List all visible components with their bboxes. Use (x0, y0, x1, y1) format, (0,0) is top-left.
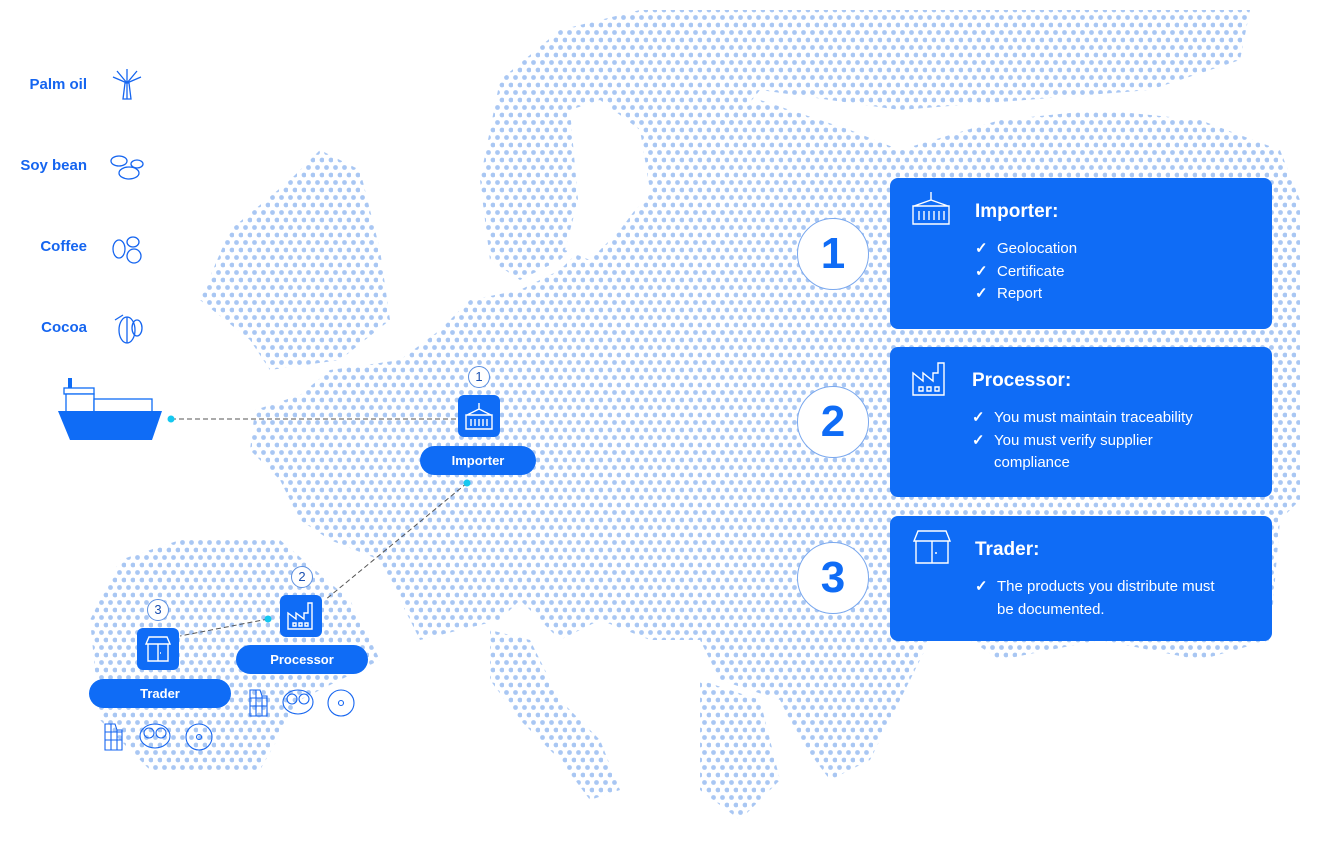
panel: processor: You must maintain traceability (994, 409, 1193, 426)
step number 2: 2 (821, 397, 845, 446)
panel: processor (890, 347, 1272, 497)
node: importer: 1 (475, 369, 483, 384)
food icons trader (104, 724, 213, 750)
node: processor: 2 (298, 569, 306, 584)
label: soy bean: Soy bean (20, 157, 87, 174)
panel: importer: Report (997, 285, 1042, 302)
node: processor: Processor (270, 652, 334, 667)
node: trader: Trader (140, 686, 180, 701)
node: processor (236, 566, 368, 674)
node: importer: Importer (452, 453, 504, 468)
label: palm oil: Palm oil (29, 76, 87, 93)
panel: processor: Processor: (972, 370, 1071, 391)
node: trader (89, 599, 231, 708)
commodity labels (20, 76, 88, 336)
step number 1: 1 (821, 229, 845, 278)
panel: importer: Importer: (975, 201, 1058, 222)
step number 3 (797, 542, 869, 614)
commodity icons (110, 69, 144, 344)
panel: processor: You must verify supplier compliance (994, 432, 1153, 471)
step number 2 (797, 386, 869, 458)
step number 1 (797, 218, 869, 290)
node: trader: 3 (154, 602, 162, 617)
label: cocoa: Cocoa (41, 319, 87, 336)
icon: ship (58, 378, 162, 440)
panel: trader: The products you distribute must be documented. (997, 578, 1215, 618)
food icons processor (249, 690, 355, 716)
panel: importer (890, 178, 1272, 329)
panel: trader: Trader: (975, 539, 1039, 560)
panel: trader (890, 516, 1272, 641)
label: coffee: Coffee (40, 238, 87, 255)
node: importer (420, 366, 536, 475)
step number 3: 3 (821, 553, 845, 602)
dashed connectors (168, 416, 470, 636)
panel: importer: Certificate (997, 262, 1065, 280)
panel: importer: Geolocation (997, 240, 1077, 257)
